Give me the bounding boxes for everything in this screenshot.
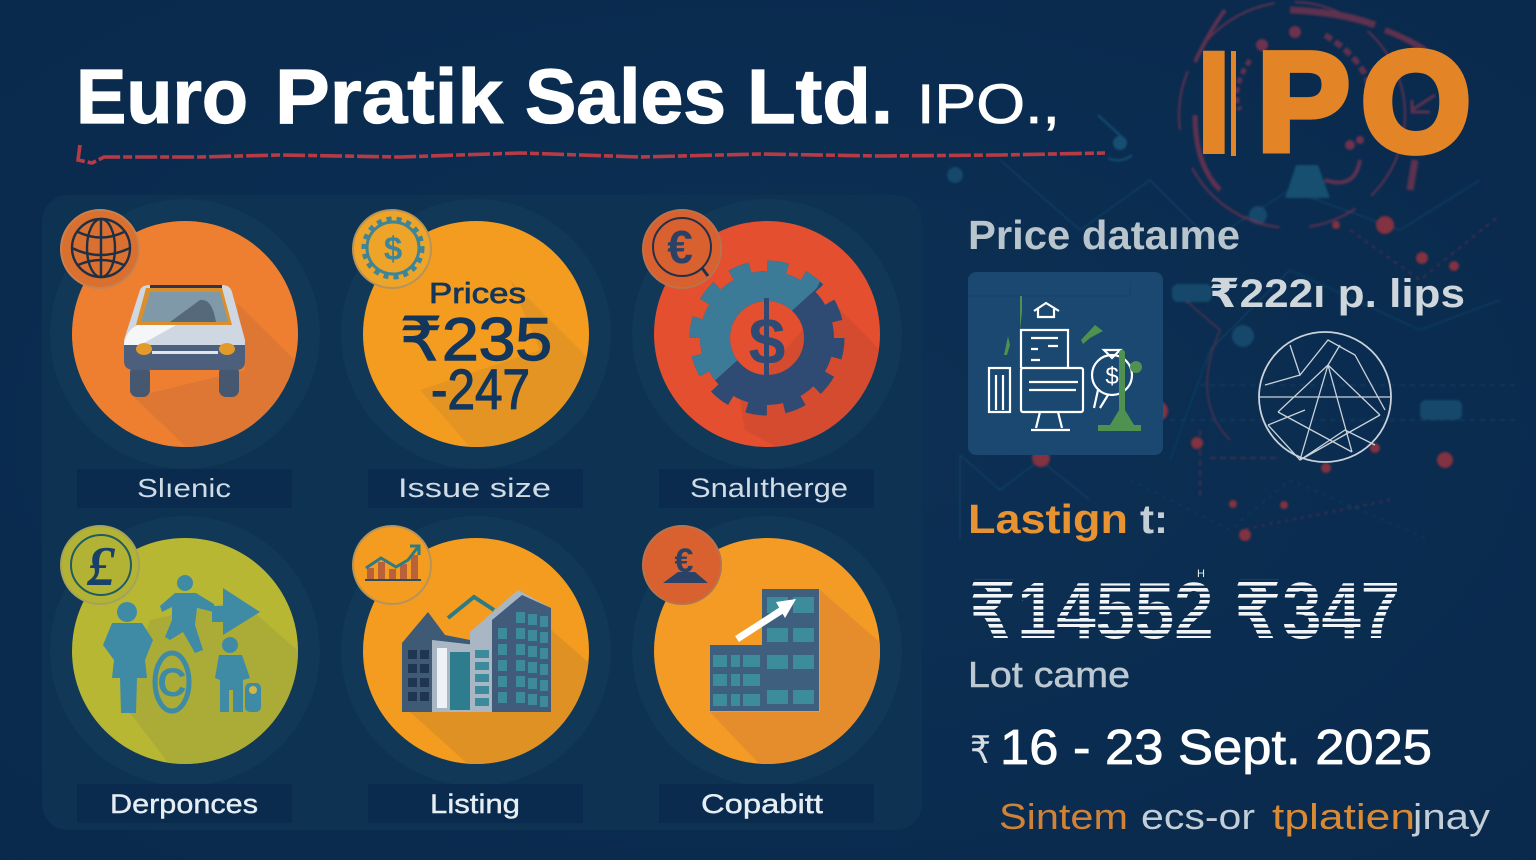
title: Ltd. (747, 54, 893, 140)
footer text: ecs-or (1141, 796, 1255, 837)
icon: people group: C (158, 661, 186, 705)
card: Snalitherge (642, 209, 880, 502)
value: price per lot: ₹222ı p. lips (1209, 272, 1465, 316)
label: Slienic: Slıenic (137, 473, 231, 503)
card: Derponces (60, 525, 298, 819)
IPO logo heading: P (1257, 23, 1350, 180)
panel: finance icons: $ (1105, 363, 1119, 390)
badge: dollar cog (353, 210, 431, 288)
label: Derponces (77, 784, 292, 823)
badge: pound: £ (86, 536, 116, 598)
value: striped lot figures: ₹14552 ₹347 (968, 566, 1400, 655)
IPO logo heading (1193, 18, 1470, 186)
icon: rising block chart (710, 589, 819, 711)
value: striped lot figures: H (1197, 568, 1205, 580)
badge: growth chart (353, 526, 431, 604)
label: Snalitherge (659, 469, 874, 508)
title: Euro (76, 54, 248, 140)
footer text: Sintem (999, 796, 1128, 837)
label: Copabitt: Copabitt (701, 789, 824, 819)
IPO logo heading: O (1362, 23, 1470, 180)
badge: euro magnifier (643, 210, 721, 288)
icon: car (124, 285, 245, 397)
heading: Lastign t: Lastign (968, 496, 1128, 542)
IPO logo heading: I (1193, 18, 1235, 186)
value: dates: 16 - 23 Sept. 2025 (1000, 721, 1432, 775)
title (76, 54, 1060, 140)
price text: ₹235 (400, 306, 552, 373)
title: Sales (525, 54, 726, 140)
icon: dollar gear: $ (749, 304, 785, 378)
card: Slienic (60, 209, 298, 498)
icon: dollar gear (696, 267, 838, 409)
title underline (78, 145, 1105, 163)
badge: euro magnifier: € (667, 221, 693, 273)
footer text: tplatien (1272, 796, 1415, 837)
price text: Prices (429, 278, 526, 310)
badge: globe (61, 210, 139, 288)
icon: wireframe globe (1259, 332, 1391, 462)
price text: -247 (431, 358, 530, 422)
label: Derponces: Derponces (110, 789, 258, 819)
icon: people group (103, 575, 261, 713)
label: Snalitherge: Snalıtherge (690, 473, 848, 503)
footer text (999, 796, 1490, 837)
footer text: jnay (1412, 796, 1490, 837)
panel: finance icons (968, 272, 1163, 455)
panel: key facts grid (42, 195, 922, 830)
title: Pratik (275, 54, 503, 140)
price text (400, 278, 552, 422)
badge: dollar cog: $ (384, 230, 402, 267)
label: Issue size: Issue size (398, 473, 551, 503)
badge: euro hand (643, 526, 721, 604)
badge: euro hand: € (675, 542, 694, 580)
card: Copabitt (642, 525, 880, 819)
heading: Price dataime: Price dataıme (968, 212, 1240, 258)
value: dates: ₹ (970, 730, 991, 772)
badge: pound (61, 526, 139, 604)
text: Lot came: Lot came (968, 654, 1130, 695)
card: Issue size (352, 209, 589, 498)
background network pattern (947, 2, 1520, 541)
heading: Lastign t: t: (1140, 496, 1168, 542)
label: Copabitt (659, 784, 874, 823)
label: Listing (368, 784, 583, 823)
card: Listing (352, 525, 589, 819)
label: Listing: Listing (430, 789, 520, 819)
icon: office buildings (402, 590, 551, 712)
title: IPO., (917, 72, 1060, 135)
label: Slienic (77, 469, 292, 508)
label: Issue size (368, 469, 583, 508)
